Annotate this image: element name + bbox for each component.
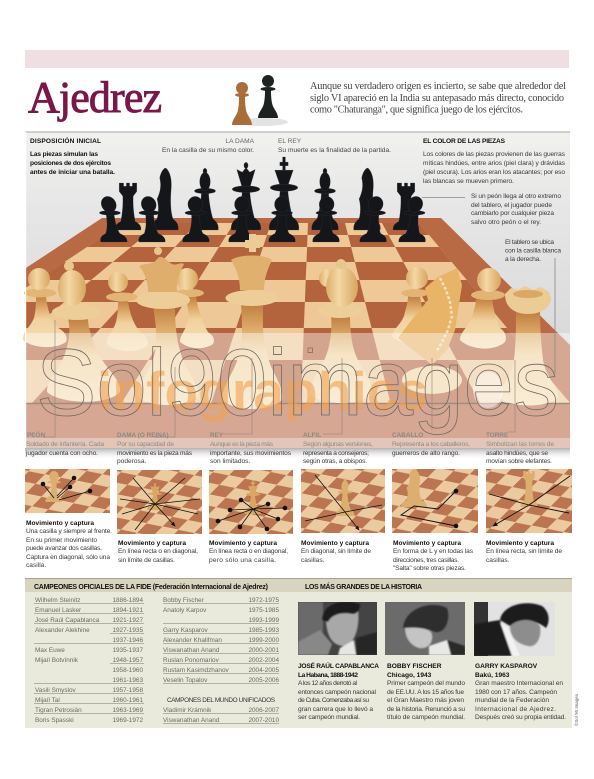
- caption: alfil: En diagonal, sin límite de: [301, 548, 371, 555]
- panel: FIDE champions table: 1975-1985: [248, 607, 279, 614]
- panel: FIDE champions table: CAMPONES DEL MUNDO UNIFICADOS: [167, 697, 275, 704]
- piece description: torre: Simbolizan las torres de: [486, 441, 554, 448]
- bio: Kasparov: GARRY KASPAROV: [475, 663, 538, 670]
- panel: FIDE champions table: José Raúl Capablanca: [35, 617, 100, 624]
- piece description: alfil: representa a consejeros;: [303, 450, 369, 457]
- panel: FIDE champions table: 1935-1937: [112, 647, 143, 654]
- panel: FIDE champions table: 1993-1999: [248, 617, 279, 624]
- piece description: rey: son limitados.: [210, 458, 250, 465]
- bio: Kasparov: Después creó su propia entidad.: [475, 714, 566, 721]
- panel: FIDE champions table: 1937-1946: [112, 637, 143, 644]
- panel: FIDE champions table: Garry Kasparov: [163, 627, 209, 634]
- portrait: Kasparov: [474, 602, 550, 656]
- thumbnail: alfil movement: [301, 469, 385, 533]
- caption: rey: En línea recta o en diagonal,: [209, 548, 288, 555]
- callout: pawn promotion: [422, 193, 561, 226]
- piece description: dama: Por su capacidad de: [117, 441, 174, 448]
- portrait: Fischer: [385, 602, 465, 655]
- icon: two pawns: [232, 75, 288, 126]
- piece description: peón: jugador cuenta con ocho.: [25, 450, 98, 457]
- translucent lower overlay: [26, 333, 570, 438]
- callout: pawn promotion: Si un peón llega al otro extremo: [471, 193, 561, 200]
- panel: FIDE champions table: Wilhelm Steinitz: [35, 597, 80, 604]
- panel: FIDE champions table: 1985-1993: [248, 627, 279, 634]
- panel: FIDE champions table: Vladimir Krámnik: [163, 707, 212, 714]
- panel: FIDE champions table: 2002-2004: [248, 657, 279, 664]
- bio: Kasparov: mundial de la Federación: [475, 697, 549, 704]
- caption: torre: En línea recta, sin límite de: [486, 548, 562, 555]
- panel: FIDE champions table: 1961-1963: [112, 677, 143, 684]
- bio: Fischer: título de campeón mundial.: [387, 714, 465, 721]
- bio: Fischer: Chicago, 1943: [387, 672, 432, 679]
- piece description: dama: poderosa.: [117, 458, 146, 465]
- bio: Capablanca: La Habana, 1888-1942: [298, 672, 358, 679]
- panel: FIDE champions table: 2007-2010: [248, 717, 279, 724]
- top labels: [30, 136, 566, 185]
- caption: caballo: direcciones, tres casillas.: [393, 557, 459, 564]
- panel: FIDE champions table: Mijaíl Tal: [35, 697, 60, 704]
- caption: peón: [26, 520, 112, 569]
- callout: board orientation: con la casilla blanca: [505, 248, 561, 254]
- caption: rey: Movimiento y captura: [209, 540, 277, 547]
- panel: FIDE champions table: 1999-2000: [248, 637, 279, 644]
- white pawns: [23, 267, 506, 351]
- white queen: [136, 247, 198, 405]
- callout: pawn promotion: salvo otro peón o el rey.: [471, 219, 541, 226]
- bio: Fischer: [387, 663, 465, 721]
- top labels: antes de iniciar una batalla.: [30, 169, 115, 176]
- top labels: DISPOSICIÓN INICIAL: [30, 136, 101, 145]
- piece description: torre: [486, 432, 554, 465]
- intro text: como "Chaturanga", que significa juego de los ejércitos.: [310, 104, 523, 116]
- top labels: Las piezas simulan las: [30, 151, 98, 158]
- callout: board orientation: a la derecha.: [505, 256, 541, 263]
- panel header band: [25, 578, 572, 592]
- piece description: torre: movían sobre elefantes.: [486, 458, 552, 465]
- bio: Capablanca: ser campeón mundial.: [298, 714, 360, 721]
- panel: FIDE champions table: 1886-1894: [112, 597, 143, 604]
- thumbnail: rey movement: [209, 470, 293, 534]
- panel: FIDE champions table: 1957-1958: [112, 687, 143, 694]
- intro text: [310, 81, 566, 116]
- panel: FIDE champions table: 1960-1961: [112, 697, 143, 704]
- panel: FIDE champions table: Veselin Topalov: [163, 677, 208, 684]
- piece description: caballo: guerreros de alto rango.: [392, 450, 460, 457]
- panel: FIDE champions table: CAMPEONES OFICIALES DE LA FIDE (Federación Internacional de Ajedrez): [34, 584, 268, 591]
- callout: board orientation: El tablero se ubica: [505, 239, 554, 246]
- panel: FIDE champions table: Emanuel Lasker: [35, 607, 82, 614]
- caption: peón: Movimiento y captura: [26, 520, 94, 527]
- caption: torre: casillas.: [486, 557, 510, 564]
- panel: FIDE champions table: Viswanathan Anand: [163, 647, 220, 654]
- caption: caballo: "Salta" sobre otras piezas.: [393, 565, 466, 572]
- top labels: EL COLOR DE LAS PIEZAS: [423, 138, 506, 145]
- thumbnail: peón movement: [25, 469, 110, 513]
- piece description: torre: asalto hindúes, que se: [486, 450, 548, 457]
- panel: FIDE champions table: Ruslan Ponomariov: [163, 657, 220, 664]
- chess board: [26, 218, 570, 448]
- photo bottom fade: [25, 448, 570, 460]
- bio: Capablanca: [298, 661, 379, 721]
- piece leader lines: [43, 320, 515, 437]
- caption: caballo: Movimiento y captura: [393, 540, 461, 547]
- bio: Kasparov: [475, 663, 566, 721]
- panel: FIDE champions table: Alexander Alekhine: [35, 627, 90, 634]
- piece description: rey: [210, 432, 292, 465]
- piece description: rey: Aunque es la pieza más: [210, 441, 274, 448]
- caption: alfil: Movimiento y captura: [301, 540, 369, 547]
- caption: peón: En su primer movimiento: [26, 537, 97, 544]
- piece description: peón: [25, 430, 104, 457]
- piece description: dama: DAMA (O REINA): [117, 432, 169, 439]
- thumbnail: dama movement: [117, 470, 202, 534]
- caption: caballo: [393, 540, 474, 572]
- panel: FIDE champions table: Vasili Smyslov: [35, 687, 77, 694]
- panel: FIDE champions table: 2006-2007: [248, 707, 279, 714]
- white knight: [398, 268, 462, 394]
- panel: FIDE champions table: 1948-1957: [112, 657, 143, 664]
- caption: rey: [209, 540, 288, 564]
- thumbnail: caballo movement: [392, 469, 478, 533]
- panel: FIDE champions table: 1972-1975: [248, 597, 279, 604]
- white bishop left: [47, 261, 120, 402]
- bio: Kasparov: Internacional de Ajedrez.: [475, 706, 556, 713]
- piece description: peón: Soldado de infantería. Cada: [26, 441, 104, 448]
- callout: board orientation: [505, 239, 561, 373]
- panel: FIDE champions table: Tigran Petrosián: [35, 707, 82, 714]
- white bishop right: [310, 259, 372, 403]
- bio: Kasparov: Gran maestro Internacional en: [475, 680, 563, 687]
- panel: FIDE champions table: Rustam Kasimdzhanov: [163, 667, 230, 674]
- caption: dama: En línea recta o en diagonal,: [118, 548, 198, 555]
- panel: FIDE champions table: 2000-2001: [248, 647, 279, 654]
- piece description: peón: PEÓN: [27, 430, 45, 439]
- panel: FIDE champions table: Alexander Khalifman: [163, 637, 222, 644]
- caption: peón: casilla.: [26, 562, 46, 569]
- bio: Fischer: BOBBY FISCHER: [387, 663, 442, 670]
- intro text: siglo VI apareció en la India su antepasado más directo, conocido: [310, 93, 564, 104]
- panel: FIDE champions table: [34, 584, 279, 724]
- caption: alfil: casillas.: [301, 557, 325, 564]
- caption: peón: Captura en diagonal, sólo una: [26, 554, 110, 561]
- bio: Fischer: Primer campeón del mundo: [387, 680, 465, 687]
- caption: torre: Movimiento y captura: [486, 540, 554, 547]
- piece description: alfil: Según algunas versiones,: [303, 441, 373, 448]
- top labels: LA DAMA: [225, 138, 255, 145]
- piece description: dama: movimiento es la pieza más: [117, 450, 193, 457]
- title: Ajedrez: [28, 73, 162, 122]
- credit: ©Sol 90 Images: [573, 693, 579, 726]
- panel: FIDE champions table: Bobby Fischer: [163, 597, 205, 604]
- panel: FIDE champions table: 1958-1960: [112, 667, 143, 674]
- bio: Capablanca: entonces campeón nacional: [298, 689, 377, 696]
- caption: dama: Movimiento y captura: [118, 540, 186, 547]
- panel: greatest players: [298, 582, 566, 721]
- panel: FIDE champions table: Boris Spasski: [35, 717, 74, 724]
- panel: FIDE champions table: 1894-1921: [112, 607, 143, 614]
- bio: Capablanca: JOSÉ RAÚL CAPABLANCA: [298, 661, 379, 670]
- piece description: rey: REY: [210, 432, 224, 439]
- top labels: EL REY: [278, 138, 302, 145]
- bio: Capablanca: gran carrera que lo llevó a: [298, 706, 373, 713]
- thumbnail: torre movement: [486, 469, 572, 533]
- piece description: caballo: Representa a los caballeros,: [392, 441, 470, 448]
- caption: alfil: [301, 540, 371, 564]
- bio: Fischer: de la historia. Renunció a su: [387, 706, 465, 713]
- piece description: caballo: CABALLO: [392, 432, 423, 439]
- caption: peón: puede avanzar dos casillas.: [26, 545, 102, 552]
- panel: FIDE champions table: 2005-2006: [248, 677, 279, 684]
- panel: FIDE champions table: 2004-2005: [248, 667, 279, 674]
- top labels: posiciones de dos ejércitos: [30, 160, 111, 167]
- caption: dama: [118, 540, 198, 564]
- callout: pawn promotion: cambiarlo por cualquier pieza: [471, 210, 554, 217]
- top labels: míticas hindúes, entre arios (piel clara) y drávidas: [423, 160, 566, 167]
- bio: Fischer: el Gran Maestro más joven: [387, 697, 464, 704]
- caption: peón: Una casilla y siempre al frente.: [26, 528, 112, 535]
- piece description: rey: importante, sus movimientos: [210, 450, 292, 457]
- panel: board photo: [0, 132, 572, 448]
- piece description: caballo: [392, 432, 470, 457]
- caption: dama: sin límite de casillas.: [118, 557, 175, 564]
- piece description: alfil: ALFIL: [303, 432, 321, 439]
- piece description: dama: [117, 432, 193, 465]
- watermark: infographics: [97, 360, 428, 422]
- panel: greatest players: LOS MÁS GRANDES DE LA HISTORIA: [305, 582, 422, 591]
- panel: FIDE champions table: Mijaíl Botvínnik: [35, 657, 79, 664]
- piece description: alfil: [303, 432, 373, 465]
- top pink band: [25, 50, 569, 68]
- watermark: Sol90images: [36, 330, 559, 436]
- top labels: En la casilla de su mismo color.: [162, 147, 254, 154]
- panel: FIDE champions table: Anatoly Karpov: [163, 607, 207, 614]
- white king: [222, 234, 282, 409]
- top labels: Su muerte es la finalidad de la partida.: [278, 147, 391, 154]
- piece description: alfil: según otras, a obispos.: [303, 458, 367, 465]
- portrait: Capablanca: [298, 602, 377, 655]
- intro text: Aunque su verdadero origen es incierto, se sabe que alrededor del: [310, 81, 566, 92]
- piece description: torre: TORRE: [486, 432, 509, 439]
- panel: FIDE champions table: Max Euwe: [35, 647, 65, 654]
- top labels: las blancas se mueven primero.: [423, 178, 514, 185]
- callout: pawn promotion: del tablero, el jugador puede: [471, 202, 552, 209]
- bio: Kasparov: Bakú, 1963: [475, 672, 510, 679]
- panel: FIDE champions table: 1927-1935: [112, 627, 143, 634]
- caption: caballo: En forma de L y en todas las: [393, 548, 474, 555]
- panel: FIDE champions table: Viswanathan Anand: [163, 717, 220, 724]
- white rook: [500, 286, 558, 406]
- bio: Capablanca: A los 12 años derrotó al: [298, 680, 358, 687]
- panel: FIDE champions table: 1963-1969: [112, 707, 143, 714]
- top labels: (piel oscura). Los arios eran los atacantes; por eso: [423, 169, 565, 176]
- caption: rey: pero sólo una casilla.: [209, 557, 276, 564]
- bio: Fischer: de EE.UU. A los 15 años fue: [387, 689, 464, 696]
- panel: FIDE champions table: 1921-1927: [112, 617, 143, 624]
- panel: bottom background: [25, 578, 572, 728]
- bio: Kasparov: 1980 con 17 años. Campeón: [475, 689, 557, 696]
- top labels: Los colores de las piezas provienen de las guerras: [423, 151, 566, 158]
- panel: FIDE champions table: 1969-1972: [112, 717, 143, 724]
- caption: torre: [486, 540, 562, 564]
- black pieces: [94, 157, 429, 242]
- bio: Capablanca: de Cuba. Comenzaba así su: [298, 697, 369, 704]
